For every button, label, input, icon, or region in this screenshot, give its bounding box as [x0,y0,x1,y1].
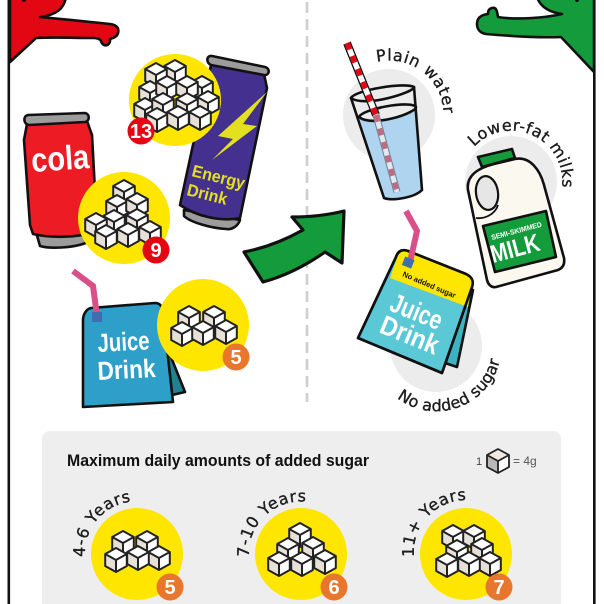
energy drink label: Drink [185,180,230,209]
milk bottle [468,149,564,287]
age group: 4-6 years [73,493,184,600]
energy drink label [185,161,248,209]
centre dashed divider [306,2,308,402]
glass of water [347,43,422,199]
grey circle: milk [465,136,557,228]
badge: 6: 6 [328,577,340,599]
badge: 7: 7 [493,577,505,599]
label: 4-6 years: 4-6 Years [73,493,130,556]
heading: Maximum daily amounts of added sugar [67,451,369,470]
legend: 1 cube = 4g: 1 [476,456,482,468]
juice drink label [97,325,157,386]
badge: 9: 9 [150,240,162,262]
sugar circle: 13 cubes [128,54,221,146]
juice drink label: Drink [376,310,444,361]
energy drink label: Energy [190,161,248,193]
icon: lightning bolt [212,92,267,160]
milk label: SEMI-SKIMMED [490,220,543,242]
age group: 7-10 years [236,492,348,600]
band text: No added sugar [401,270,457,300]
sugar circle: 5 cubes [157,279,250,371]
energy drink can [180,56,269,229]
legend: 1 cube = 4g [476,449,537,473]
cola can [24,113,97,248]
label: 7-10 years: 7-10 Years [236,492,306,556]
juice drink carton no added sugar [358,211,473,373]
juice drink label: Drink [97,353,157,386]
icon: red figure thumbs down [10,0,118,62]
icon: green figure thumbs up [477,0,594,72]
icon: straw [73,271,102,322]
milk handle [474,175,500,218]
juice drink label [376,288,447,361]
juice drink carton with added sugar [73,271,185,407]
icon: straw [402,211,417,269]
arrow [244,211,344,282]
sugar circle: 9 cubes [78,172,170,264]
badge: 5: 5 [230,347,242,369]
label: 11+ years: 11+ Years [402,491,466,556]
panel: maximum daily amounts [42,431,561,604]
label: plain water: Plain water [376,48,453,114]
icon: striped straw [347,43,397,192]
badge: 13: 13 [130,121,152,143]
label: lower-fat milks: Lower-fat milks [467,122,574,187]
juice drink label: Juice [97,325,150,358]
juice drink label: Juice [386,288,447,336]
milk label: MILK [487,229,543,269]
label: no added sugar: No added sugar [398,358,499,412]
grey circle: water [343,69,435,161]
left border line [8,0,10,604]
right border line [593,0,596,604]
age group: 11+ years [402,491,512,600]
legend: 1 cube = 4g: = 4g [513,454,537,468]
badge: 5: 5 [164,577,176,599]
cola label: cola [30,138,91,180]
grey circle: no added sugar [390,300,482,392]
